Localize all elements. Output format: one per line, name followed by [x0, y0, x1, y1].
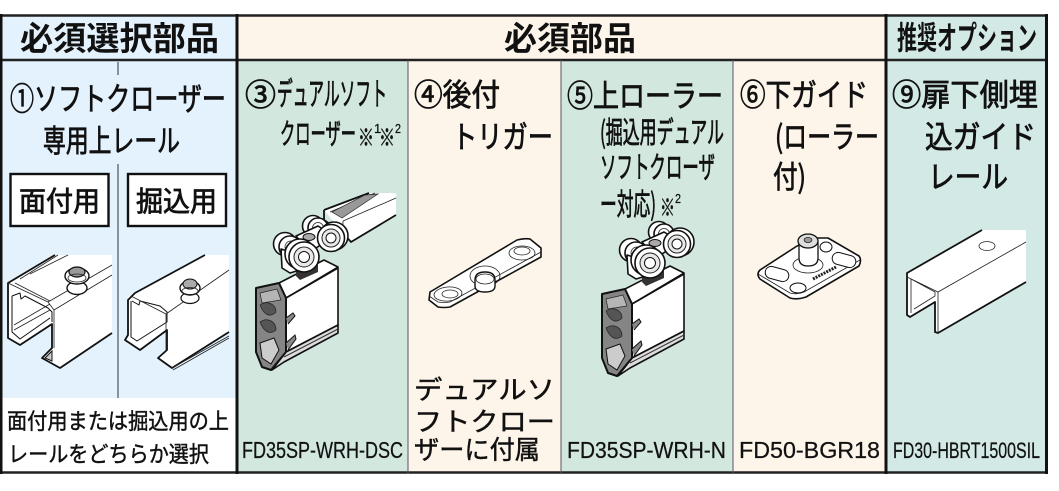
label box: surface mount: 面付用 — [19, 180, 100, 220]
panel: required selection header — [2, 16, 236, 60]
title: item 9: 込ガイド — [925, 112, 1036, 157]
title: item 3: ※ — [379, 118, 395, 153]
note: choose surface or recessed rail: 面付用または掘込用の上 — [7, 404, 229, 436]
title: item 5: ソフトクローザ — [600, 143, 715, 187]
icon: upper roller — [602, 222, 694, 376]
icon: recessed guide rail — [907, 230, 1026, 333]
label box: recessed mount — [128, 174, 226, 226]
panel: option header — [887, 16, 1045, 60]
title: item 1 — [10, 74, 226, 161]
title: item 3: デュアルソフト — [277, 69, 387, 115]
title: item 6: (ローラー — [775, 112, 879, 157]
title: item 4 — [414, 70, 553, 157]
panel: required parts header — [238, 16, 886, 60]
icon: surface mount rail — [8, 255, 112, 368]
title: item 3: ③ — [245, 70, 276, 115]
heading: required parts: 必須部品 — [504, 12, 636, 60]
label box: surface mount — [10, 174, 108, 226]
note: choose surface or recessed rail: レールをどちらか選択 — [8, 437, 209, 469]
title: item 5 — [567, 71, 724, 224]
panel: item 6 — [733, 60, 886, 473]
panel: required selection note background — [2, 398, 236, 473]
label box: recessed mount: 掘込用 — [136, 180, 217, 220]
title: item 4: トリガー — [452, 112, 553, 157]
title: item 4: ④後付 — [414, 70, 500, 115]
title: item 5: (掘込用デュアル — [600, 108, 724, 152]
title: item 6: ⑥下ガイド — [740, 70, 868, 115]
title: item 9: ⑨扉下側埋 — [892, 70, 1038, 115]
title: item 3: 2 — [395, 121, 401, 136]
title: item 3: ※ — [358, 118, 374, 153]
icon: recessed mount rail — [125, 255, 229, 370]
icon: rear trigger plate — [429, 239, 541, 308]
title: item 1: 専用上レール — [43, 116, 180, 161]
icon: dual soft closer with rail — [256, 193, 396, 370]
title: item 9 — [892, 70, 1038, 197]
note: included with dual soft closer: ザーに付属 — [414, 430, 540, 467]
panel: item 3 — [238, 60, 408, 473]
part number: item 5: FD35SP-WRH-N — [567, 437, 726, 463]
title: item 6: 付) — [773, 152, 806, 197]
heading: required selection parts: 必須選択部品 — [20, 12, 219, 60]
icon: lower guide with roller — [758, 234, 860, 299]
part number: item 3: FD35SP-WRH-DSC — [242, 437, 403, 463]
note: choose surface or recessed rail — [7, 404, 229, 469]
panel: item 9 — [887, 60, 1045, 473]
note: included with dual soft closer: フトクロー — [414, 402, 555, 439]
title: item 5: 2 — [675, 191, 681, 206]
title: item 5: ⑤上ローラー — [567, 71, 723, 116]
note: included with dual soft closer — [414, 370, 555, 467]
title: item 5: ※ — [660, 188, 675, 223]
title: item 3: クローザー — [280, 111, 356, 153]
title: item 1: ①ソフトクローザー — [10, 74, 226, 120]
title: item 3 — [245, 69, 401, 153]
title: item 9: レール — [928, 152, 1008, 197]
note: included with dual soft closer: デュアルソ — [414, 370, 555, 407]
panel: item 5 — [561, 60, 733, 473]
panel: required selection background — [2, 60, 236, 398]
part number: item 6: FD50-BGR18 — [739, 437, 880, 463]
title: item 5: ー対応) — [600, 180, 656, 224]
title: item 3: 1 — [374, 121, 381, 136]
panel: item 4 — [408, 60, 561, 473]
title: item 6 — [740, 70, 879, 197]
